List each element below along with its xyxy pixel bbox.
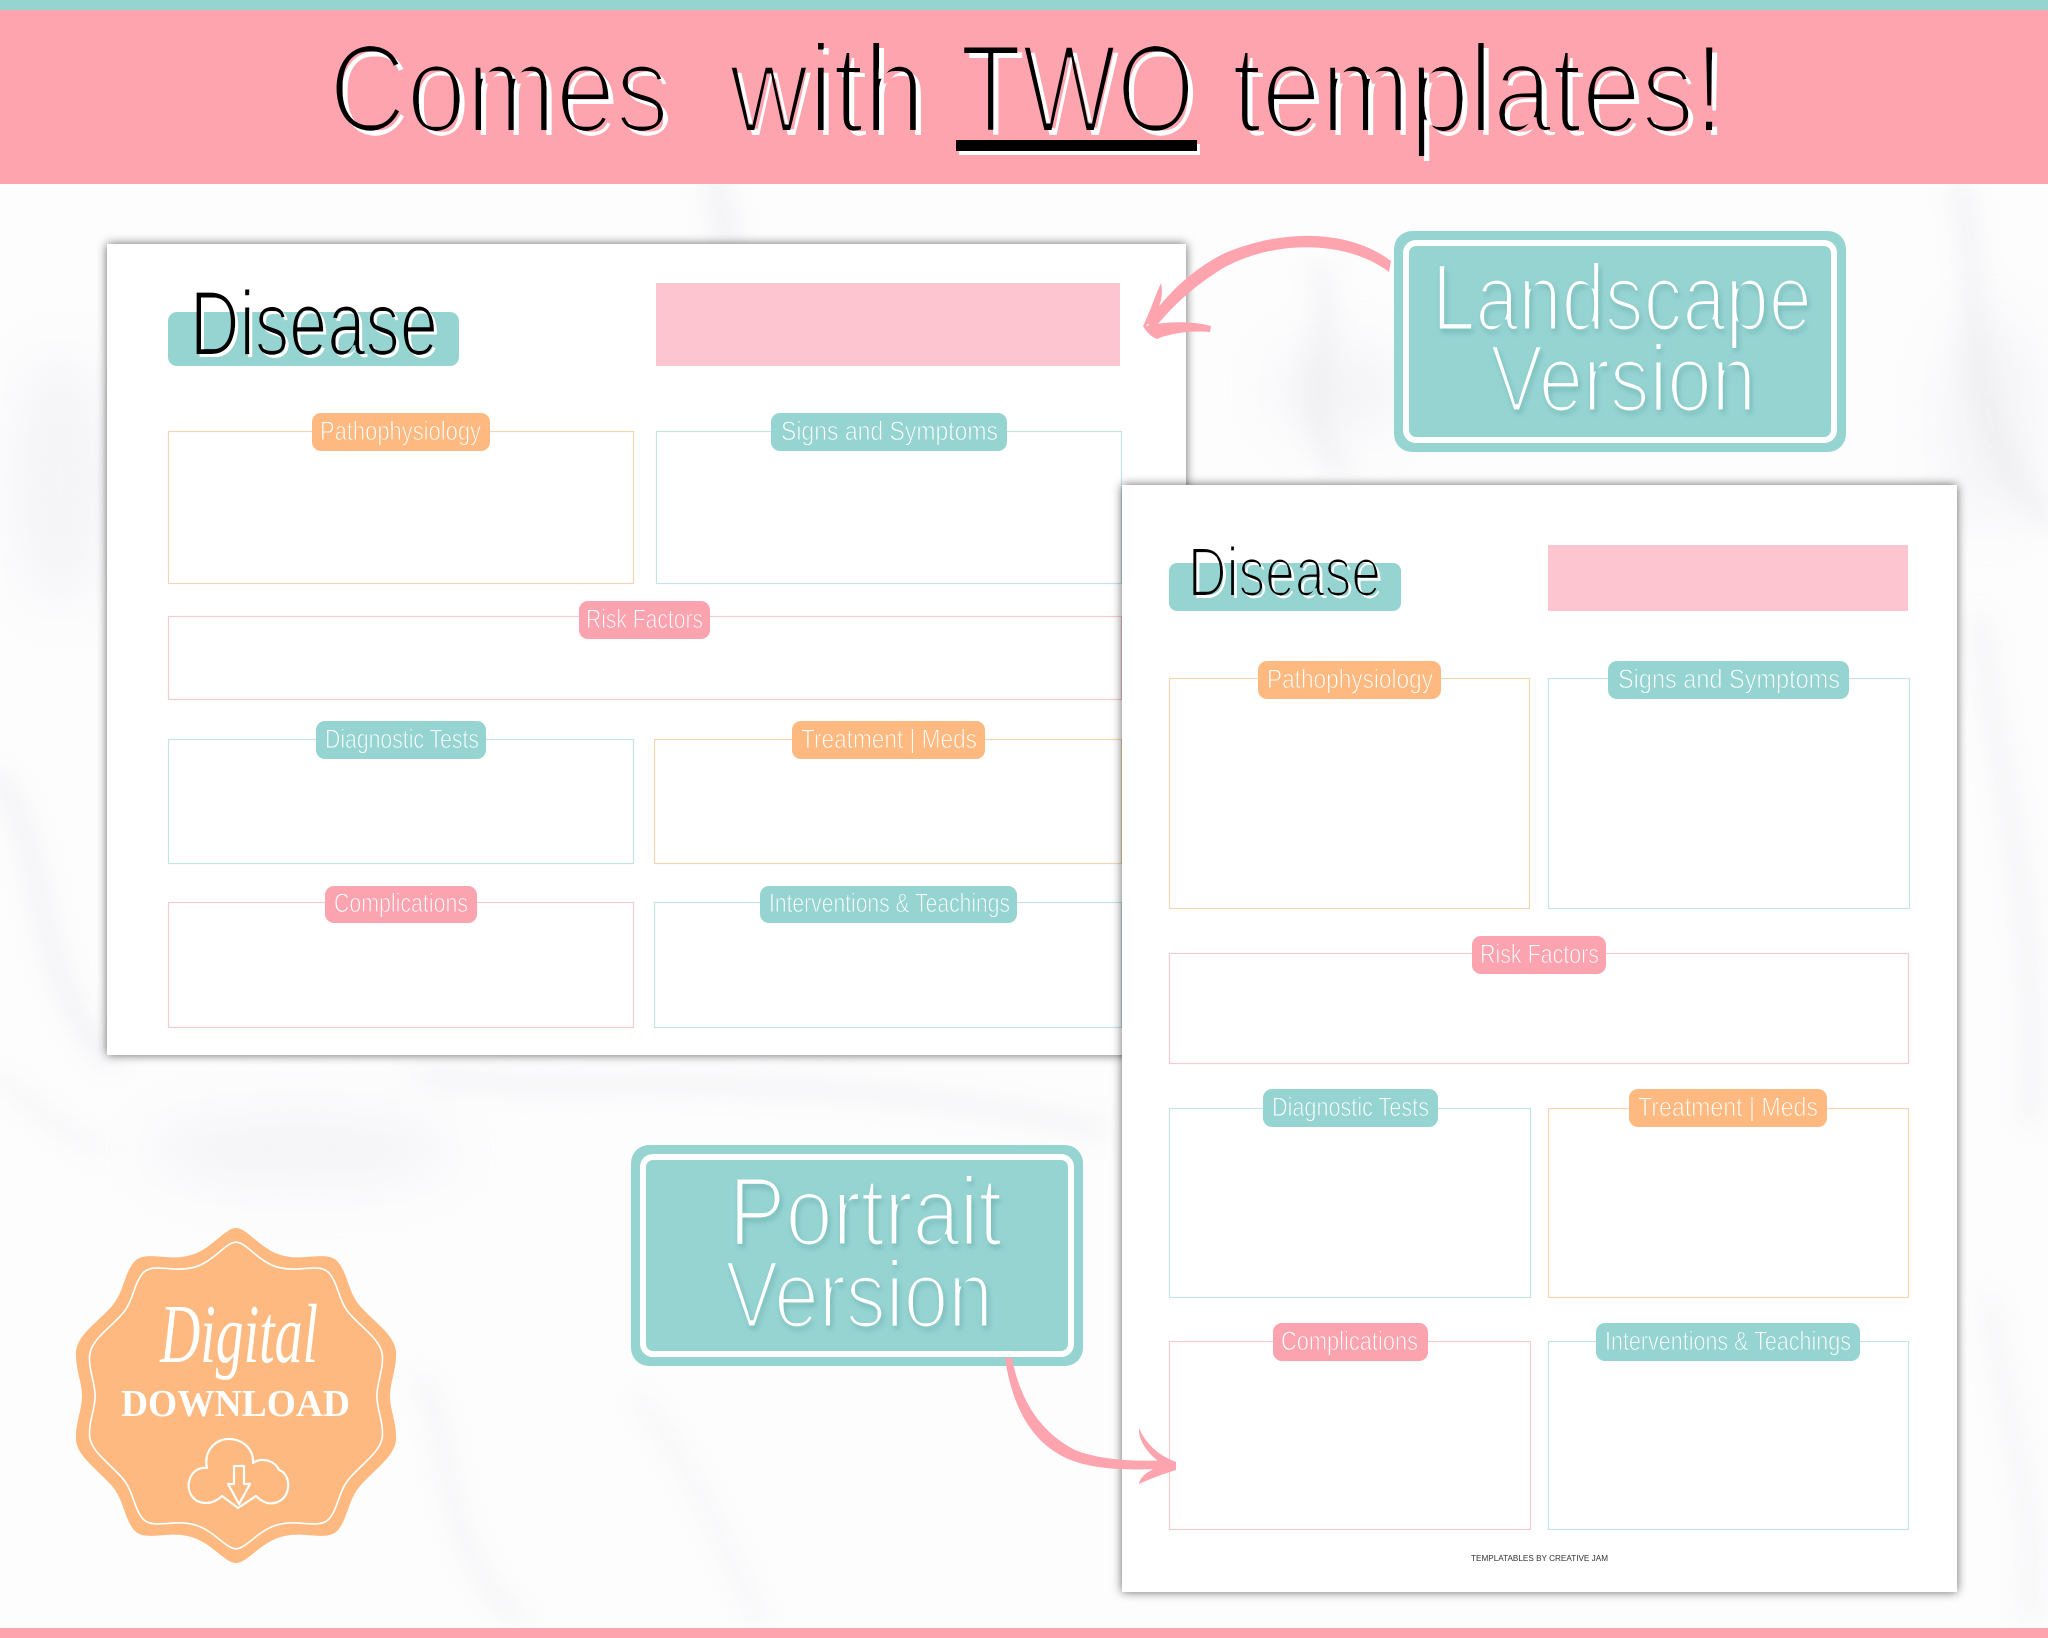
section: Risk Factors bbox=[1170, 936, 1908, 1064]
section: Risk Factors: Risk Factors bbox=[586, 604, 703, 634]
section: Signs and Symptoms: Signs and Symptoms bbox=[1618, 664, 1840, 694]
callout: Landscape Version: Version bbox=[1490, 326, 1756, 432]
section: Signs and Symptoms bbox=[656, 413, 1122, 584]
callout: Portrait Version: Portrait bbox=[729, 1157, 1002, 1266]
top teal strip bbox=[0, 0, 2048, 10]
panel: portrait template bbox=[1122, 485, 1957, 1592]
title text: with bbox=[728, 20, 925, 159]
seal shape bbox=[76, 1228, 396, 1563]
section: Pathophysiology: Pathophysiology bbox=[320, 416, 481, 446]
section: Risk Factors bbox=[168, 601, 1122, 700]
section: Complications: Complications bbox=[334, 888, 468, 918]
title text: templates! bbox=[1232, 20, 1724, 159]
arrow: portrait callout to portrait page bbox=[1005, 1358, 1176, 1484]
section: Pathophysiology: Pathophysiology bbox=[1267, 664, 1433, 694]
bottom pink strip bbox=[0, 1628, 2048, 1638]
section: Treatment | Meds: Treatment | Meds bbox=[801, 724, 977, 754]
panel: landscape template bbox=[107, 244, 1186, 1055]
section: Complications bbox=[1170, 1323, 1530, 1530]
section: Risk Factors: Risk Factors bbox=[1480, 939, 1599, 969]
section: Signs and Symptoms: Signs and Symptoms bbox=[781, 416, 998, 446]
icon: cloud download bbox=[189, 1439, 288, 1508]
arrow: landscape callout to landscape page bbox=[1143, 236, 1391, 339]
section: Complications: Complications bbox=[1281, 1326, 1418, 1356]
callout: Landscape Version bbox=[1394, 231, 1846, 452]
heading pill: Disease: Disease bbox=[190, 273, 438, 375]
callout: Portrait Version: Version bbox=[725, 1242, 993, 1348]
title text bbox=[329, 20, 1724, 159]
footer credit: TEMPLATABLES BY CREATIVE JAM bbox=[1471, 1554, 1608, 1563]
section: Treatment | Meds: Treatment | Meds bbox=[1638, 1092, 1818, 1122]
badge text: Digital: Digital bbox=[159, 1288, 318, 1381]
section: Interventions & Teachings bbox=[654, 886, 1122, 1028]
badge text: DOWNLOAD: DOWNLOAD bbox=[121, 1383, 350, 1425]
section: Pathophysiology bbox=[1170, 661, 1530, 908]
section: Diagnostic Tests bbox=[1170, 1089, 1530, 1298]
title banner bbox=[0, 10, 2048, 184]
section: Interventions & Teachings: Interventions & Teachings bbox=[1605, 1326, 1851, 1356]
callout: Landscape Version: Landscape bbox=[1432, 245, 1812, 351]
badge: Digital Download bbox=[76, 1228, 396, 1563]
section: Pathophysiology bbox=[168, 413, 634, 584]
title field bbox=[1548, 545, 1908, 611]
section: Diagnostic Tests: Diagnostic Tests bbox=[325, 724, 479, 754]
section: Interventions & Teachings bbox=[1548, 1323, 1908, 1530]
title field bbox=[656, 283, 1120, 366]
callout: Portrait Version bbox=[631, 1145, 1083, 1366]
section: Signs and Symptoms bbox=[1548, 661, 1910, 908]
section: Treatment | Meds bbox=[654, 721, 1122, 864]
section: Interventions & Teachings: Interventions & Teachings bbox=[769, 888, 1010, 918]
section: Diagnostic Tests bbox=[168, 721, 634, 864]
underline under TWO bbox=[956, 140, 1200, 155]
heading pill: Disease: Disease bbox=[1188, 533, 1381, 611]
section: Treatment | Meds bbox=[1548, 1089, 1908, 1298]
section: Diagnostic Tests: Diagnostic Tests bbox=[1272, 1092, 1429, 1122]
section: Complications bbox=[168, 886, 634, 1028]
title text: TWO bbox=[960, 20, 1195, 159]
seal inner line bbox=[90, 1242, 382, 1549]
title text: Comes bbox=[329, 20, 669, 159]
